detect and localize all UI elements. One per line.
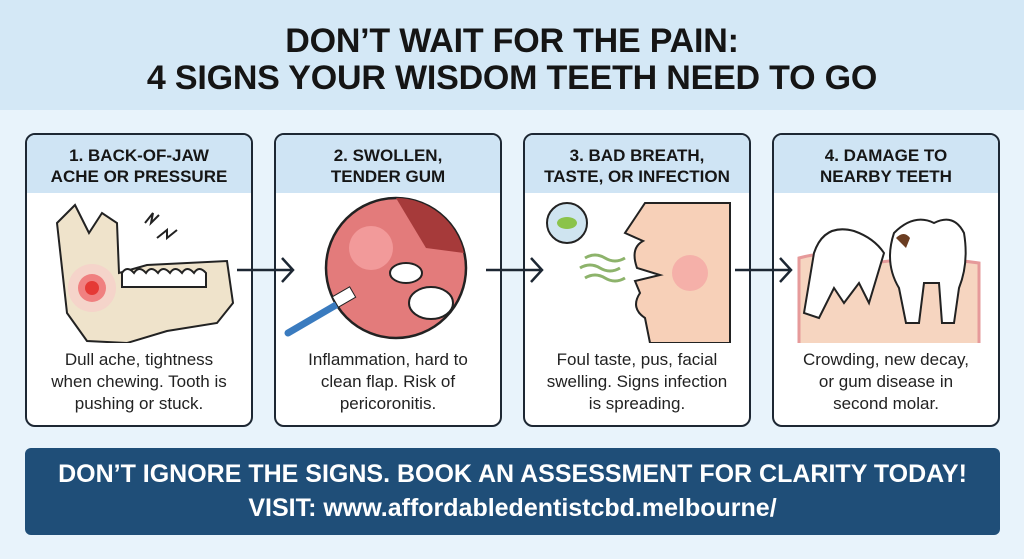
arrow 1 (237, 258, 293, 282)
text: panel 4 (803, 350, 969, 413)
title: DON’T WAIT FOR THE PAIN: (285, 22, 739, 60)
heading: panel 2: 2. SWOLLEN, (334, 146, 442, 165)
heading: panel 2: TENDER GUM (331, 167, 445, 186)
text: panel 1: pushing or stuck. (75, 394, 203, 413)
heading: panel 4: NEARBY TEETH (820, 167, 952, 186)
heading: panel 3: TASTE, OR INFECTION (544, 167, 730, 186)
illustration: teeth (798, 218, 980, 343)
heading: panel 1 (27, 135, 251, 193)
heading: panel 1: 1. BACK-OF-JAW (69, 146, 209, 165)
heading: panel 2 (276, 135, 500, 193)
text: panel 4: second molar. (833, 394, 939, 413)
arrow 2 (486, 258, 542, 282)
text: panel 4: Crowding, new decay, (803, 350, 969, 369)
panel: back-of-jaw ache (25, 133, 253, 427)
illustration: gum circle (284, 196, 468, 340)
text: panel 3: is spreading. (589, 394, 685, 413)
title (0, 0, 1024, 110)
text: panel 3 (547, 350, 727, 413)
text: panel 2 (308, 350, 468, 413)
text: panel 3: swelling. Signs infection (547, 372, 727, 391)
arrow 3 (735, 258, 791, 282)
text: panel 3: Foul taste, pus, facial (557, 350, 717, 369)
title: 4 SIGNS YOUR WISDOM TEETH NEED TO GO (147, 59, 877, 97)
panel: damage to nearby teeth (772, 133, 1000, 427)
text: panel 4: or gum disease in (819, 372, 953, 391)
text: panel 2: clean flap. Risk of (321, 372, 455, 391)
illustration: face (546, 202, 731, 343)
text: panel 2: Inflammation, hard to (308, 350, 468, 369)
heading: panel 4: 4. DAMAGE TO (825, 146, 947, 165)
panel: bad breath (523, 133, 751, 427)
footer banner (25, 448, 1000, 535)
footer banner: VISIT: www.affordabledentistcbd.melbourne/ (248, 494, 777, 522)
illustration: jaw (56, 203, 234, 343)
text: panel 1 (51, 350, 227, 413)
text: panel 1: when chewing. Tooth is (51, 372, 227, 391)
text: panel 2: pericoronitis. (340, 394, 436, 413)
panel: swollen gum (274, 133, 502, 427)
text: panel 1: Dull ache, tightness (65, 350, 213, 369)
footer banner: DON’T IGNORE THE SIGNS. BOOK AN ASSESSMENT FOR CLARITY TODAY! (58, 460, 967, 488)
heading: panel 3 (525, 135, 749, 193)
heading: panel 3: 3. BAD BREATH, (570, 146, 704, 165)
heading: panel 4 (774, 135, 998, 193)
heading: panel 1: ACHE OR PRESSURE (51, 167, 227, 186)
